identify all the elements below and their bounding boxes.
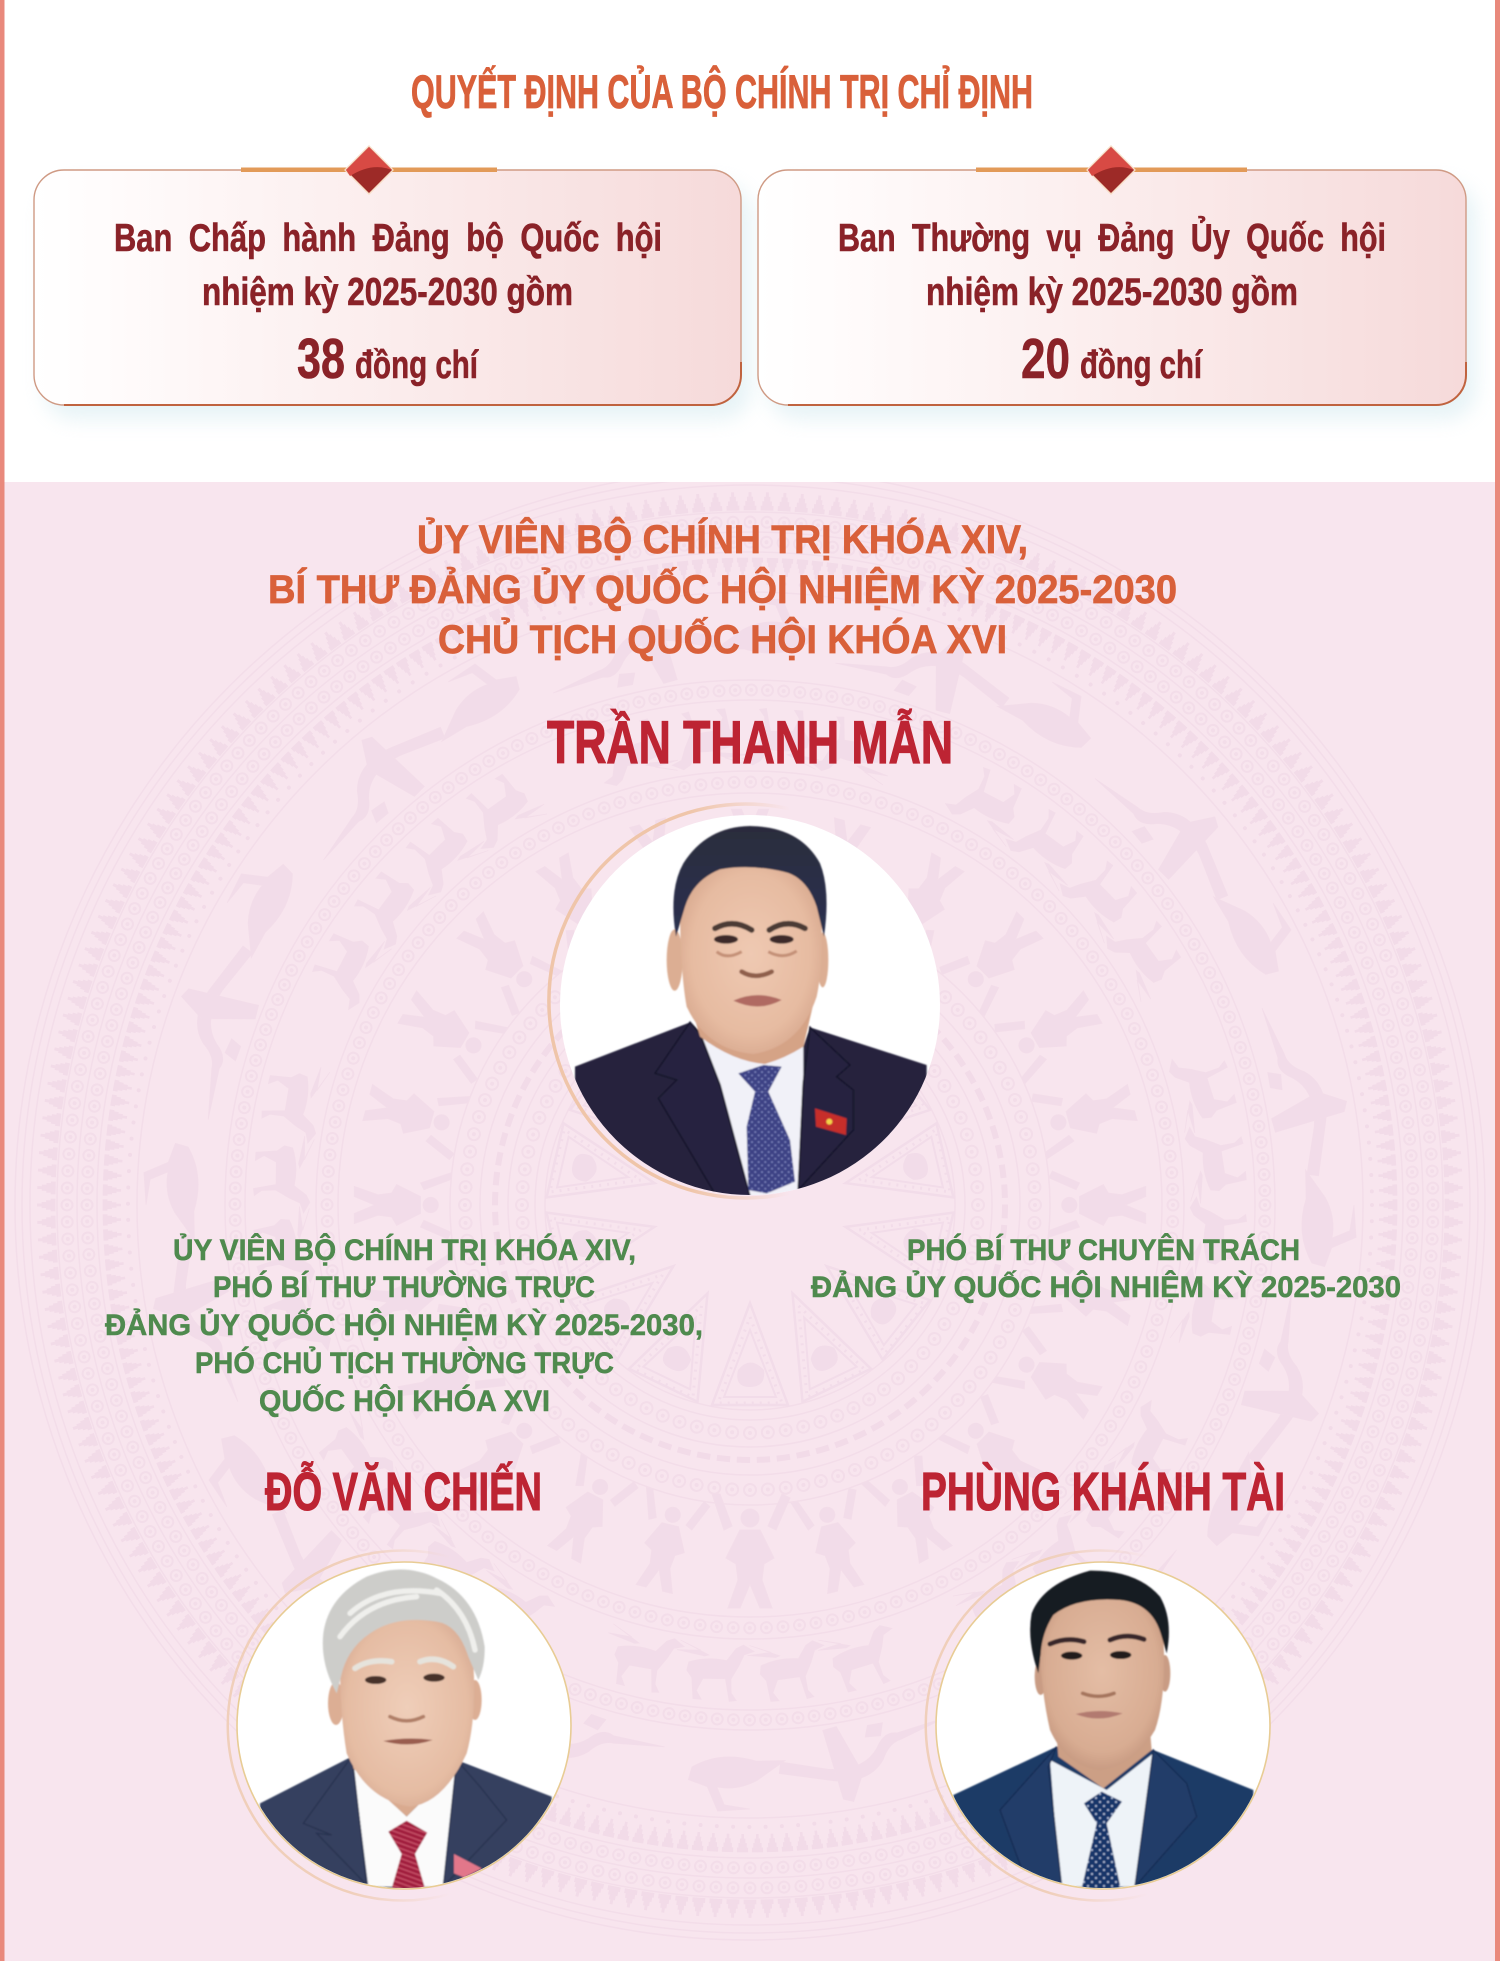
heading: chairman position: BÍ THƯ ĐẢNG ỦY QUỐC HỘI NHIỆM KỲ 2025-2030 <box>268 566 1177 612</box>
portrait: Phùng Khánh Tài <box>926 1551 1270 1907</box>
heading: chairman position: CHỦ TỊCH QUỐC HỘI KHÓA XVI <box>438 616 1007 662</box>
position text: Phùng Khánh Tài: PHÓ BÍ THƯ CHUYÊN TRÁCH <box>907 1233 1300 1267</box>
heading: chairman position <box>268 516 1177 662</box>
portrait: Trần Thanh Mẫn <box>549 804 940 1223</box>
name: Trần Thanh Mẫn: TRẦN THANH MẪN <box>547 709 953 776</box>
card text: committee description: nhiệm kỳ 2025-2030 gồm <box>202 271 573 314</box>
card text: standing committee description: nhiệm kỳ 2025-2030 gồm <box>926 271 1298 314</box>
icon: diamond ornament <box>241 146 497 194</box>
position text: Đỗ Văn Chiến: PHÓ CHỦ TỊCH THƯỜNG TRỰC <box>195 1346 614 1380</box>
name: Phùng Khánh Tài: PHÙNG KHÁNH TÀI <box>921 1462 1285 1522</box>
position text: Đỗ Văn Chiến: ĐẢNG ỦY QUỐC HỘI NHIỆM KỲ 2025-2030, <box>105 1308 703 1342</box>
card text: standing committee description <box>838 216 1386 391</box>
card text: committee description: 38 <box>297 327 345 391</box>
panel: Ban Thường vụ card <box>758 146 1476 419</box>
heading: chairman position: ỦY VIÊN BỘ CHÍNH TRỊ KHÓA XIV, <box>417 516 1028 562</box>
position text: Đỗ Văn Chiến: QUỐC HỘI KHÓA XVI <box>259 1384 550 1418</box>
panel: Ban Chấp hành card <box>34 146 751 419</box>
position text: Phùng Khánh Tài: ĐẢNG ỦY QUỐC HỘI NHIỆM KỲ 2025-2030 <box>811 1270 1401 1304</box>
bronze drum background pattern <box>15 470 1485 1940</box>
left edge strip <box>0 0 4 1961</box>
card text: standing committee description: 20 <box>1021 327 1070 391</box>
panel: lower pink section <box>0 482 1500 1961</box>
title: QUYẾT ĐỊNH CỦA BỘ CHÍNH TRỊ CHỈ ĐỊNH <box>411 65 1033 118</box>
card text: committee description: Ban Chấp hành Đảng bộ Quốc hội <box>114 217 662 260</box>
name: Đỗ Văn Chiến: ĐỖ VĂN CHIẾN <box>265 1461 542 1522</box>
right edge strip <box>1495 0 1500 1961</box>
card text: standing committee description: đồng chí <box>1080 344 1203 387</box>
position text: Đỗ Văn Chiến <box>105 1233 703 1418</box>
position text: Đỗ Văn Chiến: PHÓ BÍ THƯ THƯỜNG TRỰC <box>213 1270 595 1304</box>
card text: committee description: đồng chí <box>355 344 479 387</box>
portrait: Đỗ Văn Chiến <box>228 1551 571 1907</box>
card text: committee description <box>114 217 662 391</box>
position text: Phùng Khánh Tài <box>811 1233 1401 1304</box>
icon: diamond ornament <box>976 146 1247 194</box>
position text: Đỗ Văn Chiến: ỦY VIÊN BỘ CHÍNH TRỊ KHÓA XIV, <box>173 1233 636 1267</box>
